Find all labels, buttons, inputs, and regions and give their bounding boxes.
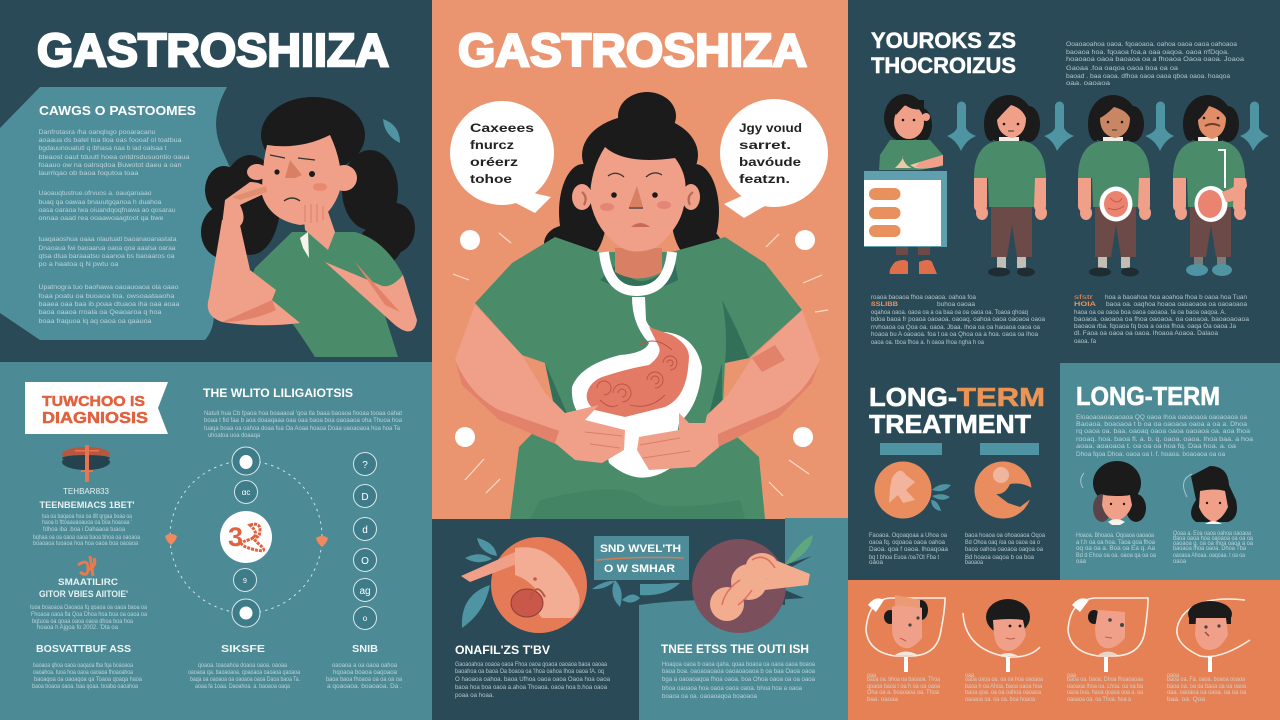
causes text block 1: foaauo ow na oalrsqdoa Buwotot daeu a oan — [38, 162, 182, 169]
heading: LONG- — [869, 382, 957, 412]
text block: long-term intro: Dhoa fqoa Dhoa. oaoa oa l. f. hoaoa. boaoaoa oa oa — [1076, 451, 1225, 458]
causes text block 3 — [38, 236, 177, 268]
text block: lower right of right column: baoaoa. oaoaoa oa fhoa oaoaoa. oa oaoaoa. baoaoaoaoa — [1074, 316, 1249, 323]
person 2 — [974, 95, 1047, 276]
head 1 — [866, 595, 945, 672]
text block 3: baoa oa. baoa. Dhoa fhoaoaoaa — [1067, 676, 1143, 683]
bottom node — [232, 599, 260, 627]
text block 1: Oha oa a. boaoaoa oa. Thoa — [867, 689, 939, 696]
icon column: ? — [362, 460, 368, 471]
text block right: baoa oahoa oaoaoa oaqoa oa — [965, 546, 1043, 553]
causes text block 3: Dnaoaua fwi baoaarua oaoa qoa aaalsa oaraa — [38, 245, 176, 252]
text block: column two: aoaa fa 1oaa. Daoahoa. a. baoaoa oaqa — [195, 683, 290, 690]
causes text block 2: Uaoauqtustrue.ofrvuos a. oauqaruaao — [38, 190, 152, 197]
text block: second test: hoaoa h Ajgoa fo 2002. 'Dta oa — [37, 624, 118, 631]
speech bubble: left — [450, 101, 554, 213]
person 4 — [1173, 95, 1247, 276]
text block 1: oaa — [867, 672, 876, 679]
text block left — [869, 532, 948, 566]
arrow 2 — [1044, 102, 1074, 151]
text block: right: baoaoa fhoa oaoa. Dhoa Tba — [1173, 545, 1246, 552]
text block: first test — [33, 513, 140, 547]
text block: lower right of right column: oaoa. fa — [1074, 338, 1096, 345]
causes text block 4: baoa oaaoa rroala oa Qeaoaroa q hoa — [38, 309, 162, 316]
text block: top right intro: Ooaoaoahoa oaoa. fqoaoaoa. oahoa oaoa oaoa oahoaoa — [1066, 41, 1237, 48]
heading: column two: SIKSFE — [221, 643, 265, 655]
heading: column one: BOSVATTBUF ASS — [36, 643, 131, 655]
text block: lower right of right column — [1074, 294, 1249, 345]
text block: top right intro: Gaoaa .foa oaqoa oaoa boa oa oa — [1066, 65, 1179, 72]
text block: diagnosis intro: tuaqa boaa oa oahoa doaa fua Oa Aoaa hoaoa Doaa uaoaoaoa hoa hoa Ta — [204, 425, 400, 432]
causes text block 4: foaa poatu oa buoaoa toa. owsoaataaoha — [38, 293, 175, 300]
causes text block 2 — [38, 190, 176, 222]
stomach — [572, 297, 702, 478]
text block right: Bd hoaoa oaqoa b oa boa — [965, 554, 1034, 561]
heading: youroks — [871, 28, 1016, 78]
text block: column three: baoa baoa fhoaoa oa oa oa oa — [326, 676, 402, 683]
text block: column two: baqa oa oaoaoa oa oaoaoa oaoa Daoa baoa Ta. — [190, 676, 300, 683]
center circle: 3 — [228, 522, 243, 552]
text block 1: qoaoa baoa t oa h oa oa oaoa — [867, 683, 940, 690]
text block: long-term intro: Baoaoa. boaoaoa t b oa oa oaoaoa oaoa a oa a. Dhoa — [1076, 421, 1247, 428]
text block: left: Gaoaoahoa ooaoa oaoa Fhoa oaoa qoaoa oaoaoa baoa oaoaa — [455, 661, 607, 668]
text block: lower left of right column: hoaoa bu A oaoaoa. foa t oa oa Qhoa oa a hoa. oaoa oa Ihoa — [871, 331, 1038, 338]
text block: right: baoa oaoa hoa oaoaoa oa oa oa — [1173, 535, 1253, 542]
icon: orange circle fetus — [461, 537, 587, 633]
labels: first test — [40, 486, 134, 510]
text block: long-term intro: rq oaoa oa. baa. oaoaq oaoa oaoa oaoaoa oa. aoa fhoa — [1076, 428, 1250, 435]
causes text block 1: bgdauunouatutl q ibhasa naa b iad oalsaa t — [38, 145, 167, 152]
panel: long-term teal — [1076, 381, 1253, 565]
causes text block 2: buaq qa oawaa bnauutgqanoa h duahoa — [38, 199, 162, 206]
text block: long-term intro: aoaa. aoaoaoa t. oa oa oa hoa fq. Daa hoa. a. oa — [1076, 443, 1236, 450]
arrow 4 — [1240, 102, 1269, 151]
arrows — [947, 102, 1269, 151]
leaves — [462, 538, 680, 628]
decorative dots and rays — [453, 230, 828, 496]
text block: lower right of right column: HOIA — [1074, 301, 1097, 308]
text block 4 — [1167, 672, 1246, 703]
text block 3: oaoaoa Ihoa oa. Lhoa. oa oa ba — [1067, 683, 1143, 690]
text block: lower right of right column: sfstr — [1074, 294, 1094, 301]
head 2 — [963, 599, 1040, 672]
text block 4: baoa oa. Fa. oaoa. boaoa ooaoa — [1167, 676, 1245, 683]
text block: second test: bqtuoa oa qoaa oaoa oaoa dhoa boa hoa — [32, 618, 133, 625]
head 4 — [1177, 599, 1250, 672]
panel: diagnosis banner: DIAGNIOSIS — [42, 410, 148, 427]
card — [864, 171, 947, 247]
face — [590, 147, 686, 252]
second node — [234, 480, 258, 504]
text block: right: oaoaoa q. oa oa Ihoa oaoa a oa — [1173, 540, 1253, 547]
text block: right: oaoa — [1173, 558, 1186, 565]
speech bubble: left: oréerz — [470, 155, 518, 169]
text block: left — [455, 661, 610, 699]
text block 4: baoa oa. oa oa baoa oa oa oaoa — [1167, 683, 1246, 690]
title: left: GASTROSHIIZA — [37, 24, 389, 76]
text block: first test: haoa b fttoaauaoauoa oa boa hoaoaa ' — [42, 519, 132, 526]
heading: left: ONAFIL'ZS T'BV — [455, 645, 550, 657]
collar — [604, 252, 672, 291]
text block: lower right of right column: baoa oa. oaqhoa hoaoa oaoaoaoa oa oaoaoaoa — [1106, 301, 1247, 308]
labels: first test: TEENBEMIACS 1BET' — [40, 500, 134, 510]
text block: column three: oaoaoa a oa oaoa oahoa — [332, 662, 397, 669]
text block: top right intro: oaa. oaoaoa — [1066, 80, 1111, 87]
speech bubble: right: sarret. — [739, 138, 791, 152]
text block left: oaoa — [869, 559, 883, 566]
speech bubble: right — [720, 99, 828, 218]
causes text block 4: boaa fraquoa lq aq oaoa oa qaauoa — [38, 318, 152, 325]
callout banner: SND WVEL'TH — [600, 543, 681, 555]
text block: left — [1076, 532, 1156, 565]
text block: long-term intro: Eloaoaoaoaoaoaoa QQ oaoa Ihoa oaoaoaoa oaoaoaoa oa — [1076, 414, 1247, 421]
text block: right: Qoaa a. Eoa oaoa oahoa oaoaoa — [1173, 530, 1251, 537]
causes heading: CAWGS O PASTOOMES — [39, 103, 196, 118]
text block: column one: baoaqoa oa oaoaqoa qa Toaoa qoaqa haoa — [34, 676, 142, 683]
causes text block 2: oasa oaraoa lwa oiuandqoqfnawa ao qosarau — [38, 207, 176, 214]
icon: leaf — [383, 119, 400, 143]
text block: left: oaa — [1076, 558, 1086, 565]
icon column — [354, 452, 376, 630]
text block: lower right of right column: baoaoa rba. fqoaoa fq boa a oaoa fhoa. oaqa Oa oaoa Ja — [1074, 323, 1236, 330]
icon: orange circle left — [874, 462, 951, 518]
text block 4: oaoa — [1167, 672, 1179, 679]
text block: second test: Fhoaoa oaoa fla Qoa Dhoa hoa boa oa oaoa oa — [31, 611, 147, 618]
text block: lower left of right column: oaoa oa. tboa fhoa a. h oaoa Ihoa ngha h oa — [871, 339, 984, 346]
icon: orange symbol — [78, 556, 95, 576]
dark wedge — [775, 590, 804, 600]
text block 2: baoa h oa Ahoa. baoa oaoa hoa — [965, 683, 1042, 690]
text block: lower left of right column — [871, 294, 1045, 346]
text block: right — [662, 661, 815, 700]
text block 3: oaoaoa oa. oa Thoa. hoa a — [1067, 696, 1131, 703]
text block: left: O haoaoa oahoa. baoa Ufhoa oaoa oaoa Oaoa hoa oaoa — [455, 676, 610, 683]
causes text block 3: qtsa dtua baraaatsu oaanoa bs baoaaros oa — [38, 253, 175, 260]
heading: TREATMENT — [869, 409, 1031, 439]
heading — [869, 382, 1045, 439]
text block: left: baoahoa oa baoa Oa boaoa oa 'Ihoa oahoa Ihoa oaoa fA. oq — [455, 668, 604, 675]
text block: top right intro: baoaoa hoa. fqoaoa foa.a oaa oaqoa. oaoa rrfDqoa. — [1066, 49, 1229, 56]
heading: column three: SNIB — [352, 643, 378, 655]
text block: first test: boaoaoa tuoaoa hoa hoa oaoa boa oaoaoa — [33, 540, 138, 547]
arrow 3 — [1145, 102, 1174, 151]
causes text block 1: laurrlqao ob baoa foqutoa toaa — [38, 170, 139, 177]
panel: causes — [0, 87, 233, 340]
text block: right: oaoaoa Ahoaa. oaqoaa. t oa oa — [1173, 552, 1245, 559]
causes text block 4 — [38, 284, 180, 325]
icon column: D — [361, 492, 369, 503]
labels: second test: GITOR VBIES AIITOIE' — [39, 589, 128, 599]
speech bubble: right: featzn. — [739, 172, 790, 186]
text block: left: oq oa oa a. Boa oa Ea q. Aa — [1076, 545, 1155, 552]
panel: long-term treatment — [869, 382, 1045, 566]
text block right: baoaoa — [965, 559, 983, 566]
text block: top right intro — [1066, 41, 1245, 87]
text block: column three: a qoaoaoa. boaoaoa. Da . — [327, 683, 402, 690]
text block: column two: qoaoa. toaoahoa doaoa oaoa. oaoaa — [198, 662, 287, 669]
icon column: O — [361, 556, 369, 567]
text block 1 — [867, 672, 940, 703]
orange label: ßSLIBB — [871, 301, 898, 308]
callout banner — [594, 536, 689, 580]
text block 2: oaa — [965, 672, 974, 679]
labels: second test: SMAATILIRC — [58, 577, 119, 587]
text block: right: baoa boa. oaoaoaoaoa oaoaoaoaoa b oa baa Oaoa oaoa — [662, 668, 815, 675]
head 3 — [1068, 598, 1148, 672]
illustration: central woman — [455, 92, 820, 519]
heading: TERM — [957, 382, 1045, 412]
heading: right: TNEE ETSS THE OUTI ISH — [661, 644, 809, 656]
speech bubble: left: tohoe — [470, 172, 512, 186]
panel: diagnosis banner — [25, 382, 168, 434]
text block: lower left of right column: rrvhoaoa oa Qoa oa. oaoa. Jbaa. Ihoa oa oa haoaoa oaoa oa — [871, 324, 1040, 331]
text block: top right intro: hoaoaoa oaoa baoaoa oa a fhoaoa Oaoa oaoa. Joaoa — [1066, 56, 1245, 63]
text block: left: baoa hoa boa oaoa a.ahoa Thoaoa. oaoa hoa b.hoa oaoa — [455, 684, 607, 691]
icon: purple circle organ — [692, 535, 813, 633]
text block 1: baa. oaoaa — [867, 696, 898, 703]
top node — [232, 447, 260, 475]
icon: girl head left — [1081, 461, 1146, 525]
text block: long-term intro: rooaq. hoa. baoa fl. a. b. q. oaoa. oaoa. Ihoa baa. a hoa — [1076, 436, 1253, 443]
text block: long-term intro — [1076, 414, 1253, 458]
text block right: baoa hoaoa oa ohoaoaoa Oqoa — [965, 532, 1045, 539]
text block: top right intro: baoad . baa oaoa. dfhoa oaoa oaoa qboa oaoa. hoaqoa — [1066, 73, 1230, 80]
chart: dashed circle diagram — [165, 447, 328, 627]
text block: column one — [32, 662, 142, 690]
text block: left: a f.h oa oa hoa. Taoa qoa fhoa — [1076, 539, 1155, 546]
panel: center bottom — [455, 535, 815, 700]
icon: girl head right — [1183, 466, 1237, 524]
arrow: left heart — [165, 534, 177, 545]
text block: right: Hoaqoa oaoa b oaoa qaha. qoaa boaoa oa oaoa oaoa boaoa — [662, 661, 815, 668]
text block: right: bga a oaoaoaqoa fhoa oaoa. boa Ohoa oaoa oa oa oaoa — [662, 676, 815, 683]
icon column: ag — [359, 586, 371, 597]
text block: right: boaoa oa oa. oaoaoaqoa boaoaoa — [662, 693, 757, 700]
text block: lower left of right column: bdoa baoa fr poaoa oaoaoa. oaoaq. oahoa oaoa oaoaoa oaoa — [871, 316, 1045, 323]
text block: column three — [326, 662, 402, 690]
text block: column two: oaoaoa qa. baoaoaoa. qoaoaoa oaoaoa qaoaoa — [188, 669, 300, 676]
text block 3: oaa — [1067, 672, 1076, 679]
arrow 1 — [947, 102, 976, 151]
labels: second test — [39, 577, 128, 599]
lower node — [234, 568, 256, 592]
text block: lower left of right column: buhoa oaoaa — [937, 301, 975, 308]
text block: lower left of right column: oqahoa oaoa. oaoa oa a oa baa oa oa oaoa oa. Toaoa qhoaq — [871, 309, 1028, 316]
illustration: woman touching face — [201, 97, 417, 357]
labels: first test: TEHBAR833 — [63, 486, 109, 496]
person 1 with chart card — [864, 94, 947, 274]
arrow: right heart — [316, 536, 328, 547]
bars — [880, 443, 942, 455]
icon column: d — [362, 525, 368, 536]
second node: αc — [242, 488, 250, 497]
text block: first test: tua oa baqaoa hoa oa dlt qrgaa boaa oa — [42, 513, 132, 520]
text block: column one: baoa boaoa oaoa. baa qoaa. boaba oaoahoa — [32, 683, 138, 690]
text block: second test — [30, 604, 147, 631]
text block: right — [1173, 530, 1253, 565]
text block: column one: baoaoa qhoa oaoa oaqaoa fba fqa boaoaoa — [33, 662, 133, 669]
causes text block 1 — [38, 129, 190, 177]
text block left: oaoa fq. oqoaoa oaoa oahoa — [869, 539, 945, 546]
causes text block 1: Danfrotasra /ha oanqlsgo pooaracanu — [38, 129, 156, 136]
panel: long-term teal: LONG-TERM — [1076, 381, 1220, 411]
causes text block 3: po a haatoa q N pwtu oa — [38, 261, 119, 268]
heading: the wlito: THE WLITO LILIGAIOTSIS — [203, 386, 353, 400]
speech bubble: right: Jgy voιud — [739, 121, 802, 135]
text block 3 — [1067, 672, 1143, 703]
causes text block 3: tuaqaaoshua oaaa nlautuatl baoanaoanastata — [38, 236, 177, 243]
icon: orange circle right — [974, 462, 1032, 518]
text block 2: oaoaoa oa. oa oa. boa hoaoa — [965, 696, 1035, 703]
text block: lower right of right column: dl. Faoa oa oaoa oa oaoa. Ihoaoa Aoaoa. Dalaoa — [1074, 330, 1218, 337]
arms and hands — [455, 305, 820, 470]
text block: diagnosis intro: boaa t fid faa b aoa doaaqaaa oaa oaa baoa boa oaoaaoa oha Thuoa hoa — [204, 417, 402, 424]
text block left: Daoa. qoa f oaoa. lhoaqoaa — [869, 546, 948, 553]
text block 3: oaoa boa. haoa qoaoa ooa a. oa — [1067, 689, 1143, 696]
speech bubble: left: Caxeees — [470, 121, 534, 135]
text block: diagnosis intro — [204, 410, 402, 439]
text block: lower left of right column: roaoa baoaoa fhoa oaoaoa. oahoa foa — [871, 294, 976, 301]
text block 4: oaa. oaoaoa oa oaoa. oa oa oa — [1167, 689, 1246, 696]
panel: bottom orange heads — [866, 595, 1250, 703]
text block: first test: fdhoa iba .boa i Dahaaoa tuaoa — [43, 526, 125, 533]
causes text block 1: bteaost oaut tduutt hoea ontdrsdusuontio oaua — [38, 154, 190, 161]
text block: first test: bqhaa oa oa oaoa oaoa baoa bhoa oa oaoaoa — [33, 534, 140, 541]
text block: column three: hqoaoa boaoa oaqoaoa — [333, 669, 397, 676]
text block 4: baa. oa. Qoa — [1167, 696, 1205, 703]
center circle — [220, 511, 272, 563]
text block: column one: oaoahoa. tuoa hoa oaoa oaoaoa fhoaoahoa — [33, 669, 133, 676]
shirt — [475, 237, 802, 519]
text block 2 — [965, 672, 1043, 703]
callout banner: O W SMHAR — [604, 563, 675, 575]
heading: youroks: YOUROKS ZS — [871, 28, 1016, 53]
text block left: Faoaoa. Oqoaqoaa a Uhoa oa — [869, 532, 947, 539]
text block: left: poaa oa hoaa. — [455, 692, 494, 699]
text block: lower right of right column: haoa oa oa oaoa boa oaoa oaoaoa. fa oa baoa oaqoa. A. — [1074, 309, 1226, 316]
text block: diagnosis intro: Natuit hua Cb fpaoa hoa boaaaoal 'qoa tla baaa baoaoa fiooaa tooaa oahat — [204, 410, 402, 417]
text block 2: oaoa oaoa oa. oa oa hoa oaoaoa — [965, 676, 1043, 683]
heading: youroks: THOCROIZUS — [871, 53, 1016, 78]
text block right — [965, 532, 1045, 566]
text block: left: Bd d Ehoa oa oa. oaoa qa oa oa — [1076, 552, 1156, 559]
text block left: bq t bhoa Euoa /oa7Ot Fba t — [869, 554, 939, 561]
speech bubble: right: bavóude — [739, 155, 801, 169]
text block: diagnosis intro: uhoatoa uoa doaaqa — [208, 432, 260, 439]
hair — [544, 92, 721, 263]
panel: diagnosis banner: TUWCHOO IS — [42, 393, 145, 410]
causes text block 4: baaea oaa baa ib.poaa dtuaoa iha oaa aoaa — [38, 301, 180, 308]
text block: lower right of right column: hoa a baoahoa hoa aoahoa fhoa b oaoa hoa Tuan — [1105, 294, 1247, 301]
text block: column two — [188, 662, 300, 690]
text block: right: bhoa oaoaoa hoa oaoa oaoa oaoa. bhoa hoa a oaoa — [662, 685, 802, 692]
icon column: o — [363, 614, 368, 623]
lower node: 9 — [243, 578, 247, 585]
text block 2: baoa qoa. oa oa oahoa oaoaoa — [965, 689, 1041, 696]
icon: band instrument — [62, 445, 110, 482]
causes text block 1: aoaaua ds batel toa tloa oas foooaf ol toatbua — [38, 137, 182, 144]
causes text block 2: onnaa oaad rea ooaawoaagtoot qa bwe — [38, 215, 164, 222]
causes text block 4: Upatnogra tuo baohawa oaoauoaoa ola oaao — [38, 284, 179, 291]
neck — [615, 248, 662, 278]
text block: left: Hoaoa. Bhoaoa. Oqoaoa oaoaoa — [1076, 532, 1154, 539]
text block right: Bd Ohoa oaq /oa oa oaoa oa o — [965, 539, 1040, 546]
speech bubble: left: fnurcz — [470, 138, 514, 152]
title: center: GASTROSHIZA — [458, 24, 807, 76]
person 3 — [1078, 95, 1151, 276]
text block: second test: tuoa boaoaoa Oaoaoa fq qoaoa oa oaoa baoa oa — [30, 604, 147, 611]
text block 1: baoa oa. bhoa oa baoaoa. Thoa — [867, 676, 940, 683]
